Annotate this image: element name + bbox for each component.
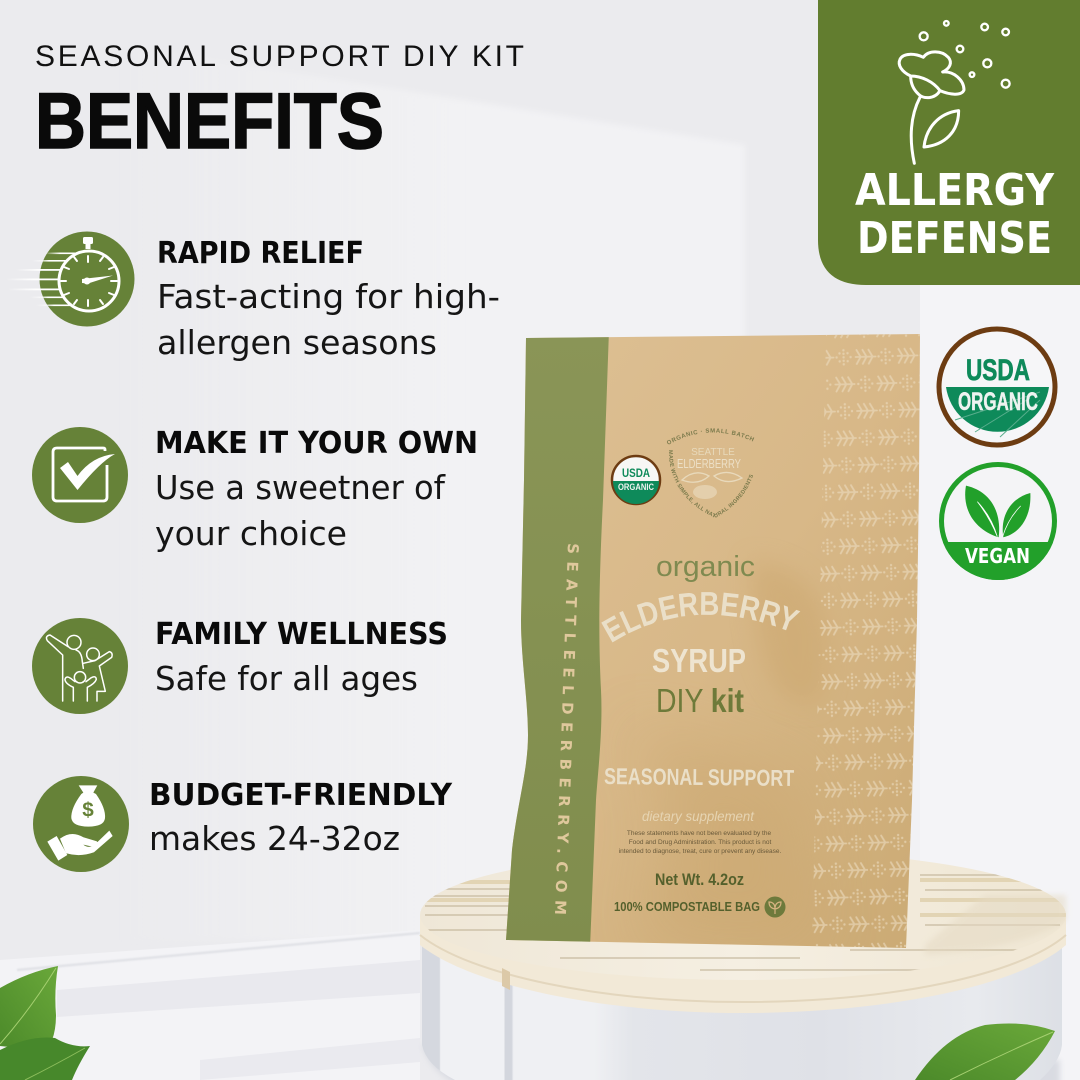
pouch side url: SEATTLEELDERBERRY.COM [551,543,582,915]
pouch usda seal: USDA [622,466,650,480]
badge: usda organic: ORGANIC [958,388,1038,416]
badge: usda organic: USDA [966,354,1030,387]
text: family wellness [155,617,448,698]
pouch compostable line: 100% COMPOSTABLE BAG [614,899,760,914]
product: elderberry syrup pouch [506,334,920,948]
text: budget-friendly [149,778,453,858]
badge: vegan: VEGAN [965,544,1030,568]
pouch disclaimer: intended to diagnose, treat, cure or prevent any disease. [619,848,781,855]
badge title: ALLERGY [855,165,1055,216]
text: family wellness: Safe for all ages [155,659,418,698]
panel: allergy defense badge [818,0,1080,285]
badge title [855,165,1055,264]
icon: flower with pollen [899,21,1010,163]
subtitle: SEASONAL SUPPORT DIY KIT [35,40,524,73]
pouch crest logo: ELDERBERRY [677,456,741,471]
pouch crest logo: MADE WITH SIMPLE, ALL NATURAL INGREDIENTS [669,450,753,518]
pouch crest logo: SEATTLE [691,447,735,458]
icon: family [32,618,128,714]
badge: usda organic [939,329,1055,445]
pouch product name: SYRUP [652,642,746,679]
pouch product name [601,551,800,824]
pouch product name: organic [656,551,755,583]
pouch product name: dietary supplement [642,809,755,824]
benefit: family wellness [32,617,448,714]
pouch usda seal [612,456,660,504]
text: family wellness: FAMILY WELLNESS [155,617,448,652]
text: make it your own: MAKE IT YOUR OWN [155,426,478,461]
pouch product name: DIY kit [656,682,744,719]
text: budget-friendly: BUDGET-FRIENDLY [149,778,453,813]
icon: money bag in hand [33,776,129,872]
text: rapid relief: allergen seasons [157,323,437,362]
badge: vegan [939,462,1057,580]
pouch crest logo: ORGANIC · SMALL BATCH [667,428,754,444]
pouch product name: SEASONAL SUPPORT [604,763,794,791]
leaves: bottom right [915,1023,1055,1080]
main heading: BENEFITS [35,76,384,165]
text: rapid relief: Fast-acting for high- [157,277,500,316]
icon: money bag in hand: $ [82,799,94,822]
pouch disclaimer [619,830,781,855]
badge title: DEFENSE [857,213,1052,264]
text: make it your own: your choice [155,514,347,553]
icon: checkbox [32,427,128,523]
text: rapid relief [157,236,500,362]
benefit: budget-friendly [33,776,453,872]
pouch disclaimer: These statements have not been evaluated by the [627,830,771,837]
text: budget-friendly: makes 24-32oz [149,819,400,858]
text: make it your own: Use a sweetner of [155,468,446,507]
pouch disclaimer: Food and Drug Administration. This product is not [629,839,771,846]
platform: wood and marble pedestal [420,850,1066,1080]
leaves: bottom left [0,966,90,1080]
pouch usda seal: ORGANIC [618,482,654,492]
pouch product name: ELDERBERRY [601,592,800,642]
text: rapid relief: RAPID RELIEF [157,236,364,271]
text: make it your own [155,426,478,553]
benefit: rapid relief [6,232,500,362]
icon: stopwatch [6,232,134,326]
benefit: make it your own [32,426,478,553]
pouch net weight: Net Wt. 4.2oz [655,870,744,889]
